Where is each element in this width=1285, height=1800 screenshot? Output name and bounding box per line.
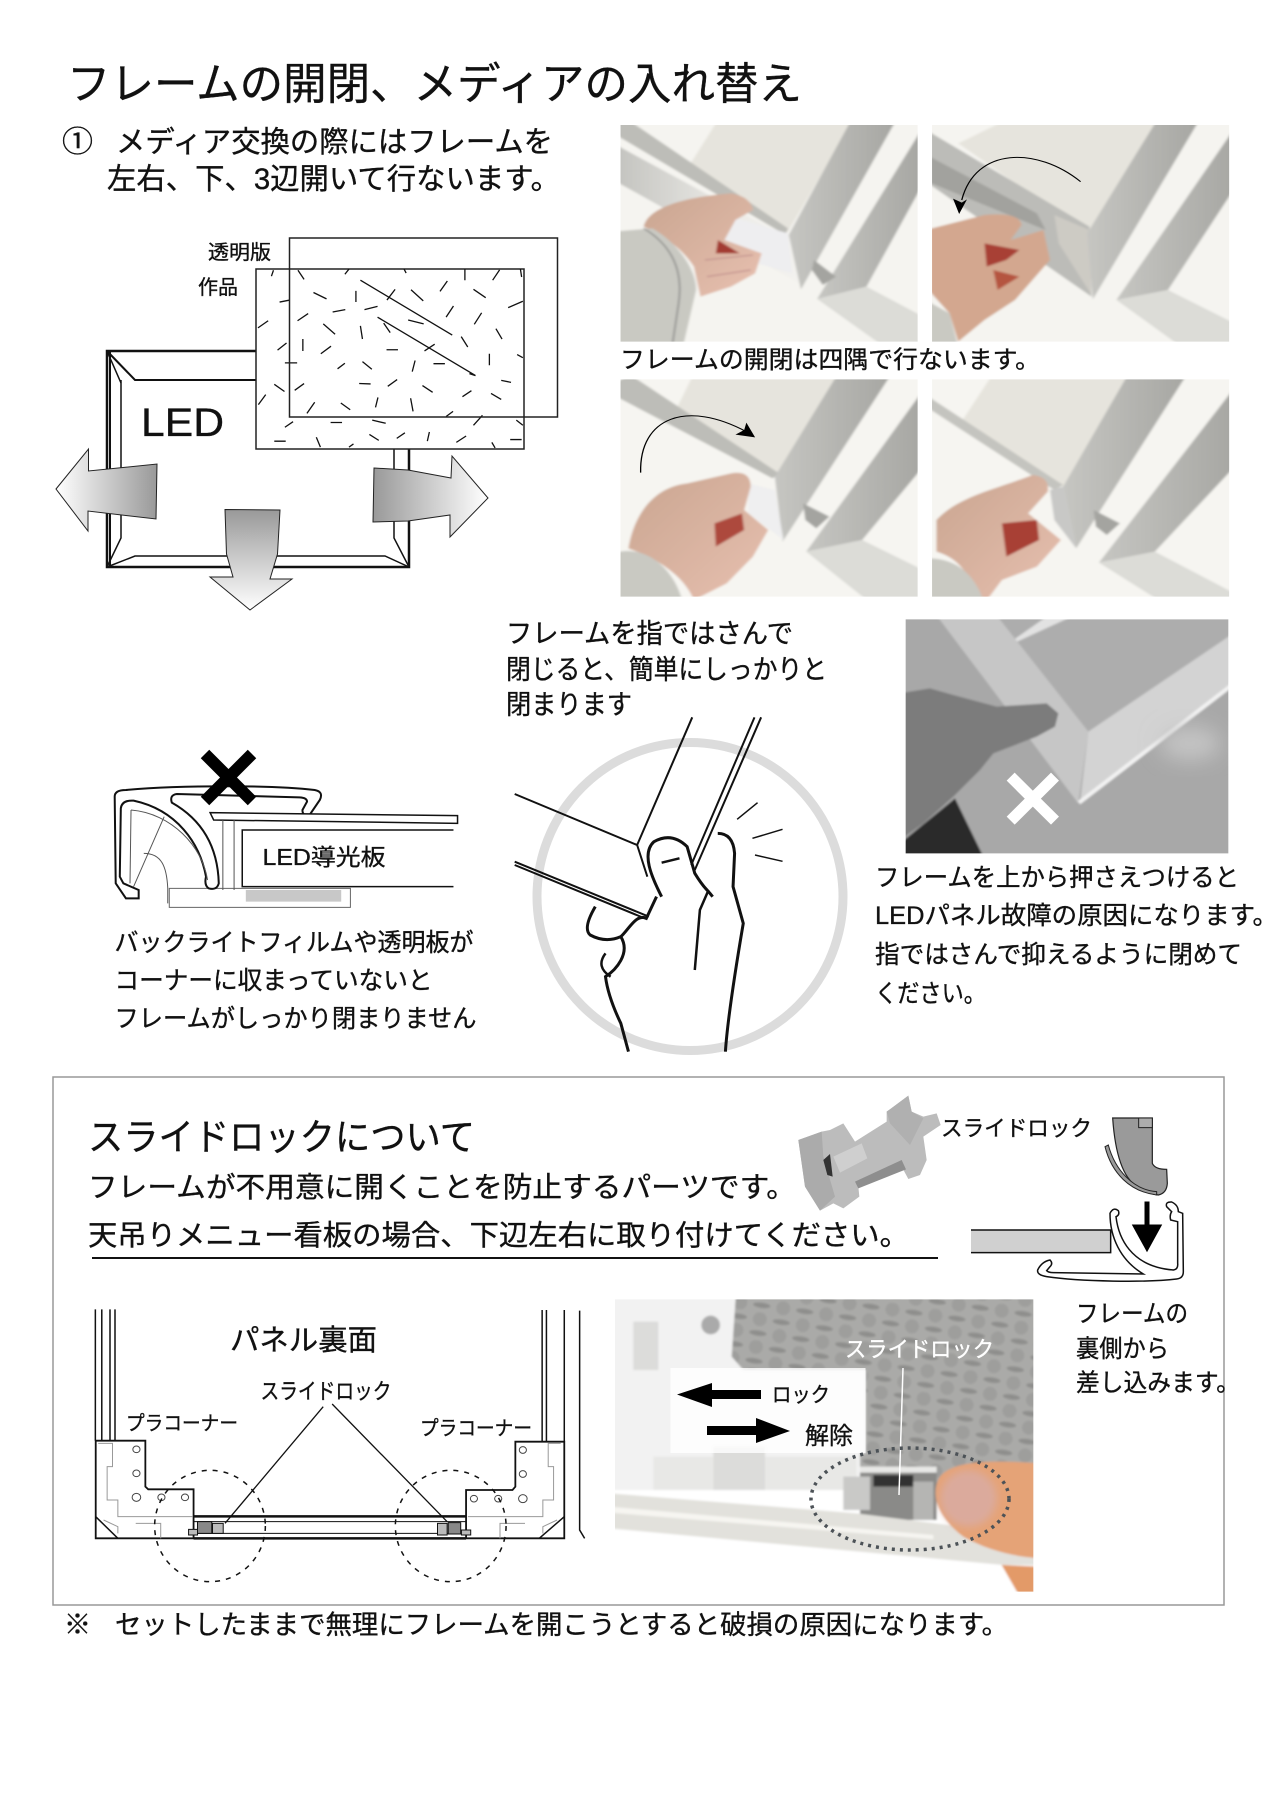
diagram: LED frame with media layers and opening arrows [56, 238, 558, 610]
arrow: insert downward [1136, 1202, 1158, 1247]
text block: pressing warning: LEDパネル故障の原因になります。 [875, 902, 1278, 930]
arrow: curved clockwise [641, 416, 755, 473]
photo grid: opening the frame corners [613, 120, 1238, 603]
text block: slide lock description [88, 1172, 938, 1258]
pointer line [899, 1368, 903, 1495]
label: plastic corner right: プラコーナー [420, 1418, 532, 1440]
photo 2 [923, 120, 1238, 347]
text block: step 1: ① [62, 126, 93, 159]
diagram: panel back side [95, 1309, 585, 1582]
footnote: ※ [64, 1610, 91, 1640]
text block: backlight film warning: コーナーに収まっていないと [114, 967, 432, 995]
label: plastic corner left: プラコーナー [126, 1413, 238, 1435]
caption: corners: フレームの開閉は四隅で行ないます。 [620, 346, 1040, 374]
arrow: release direction [707, 1418, 790, 1443]
label: slide lock white: スライドロック [845, 1337, 994, 1362]
arrow: curved counter-clockwise [953, 157, 1081, 214]
photo 1 [613, 120, 923, 347]
text block: insert from back: 差し込みます。 [1076, 1369, 1240, 1397]
text block: pressing warning: ください。 [875, 980, 986, 1008]
LED frame [107, 351, 409, 567]
arrow: right [373, 456, 488, 537]
text block: backlight film warning [114, 929, 476, 1033]
text block: backlight film warning: フレームがしっかり閉まりません [114, 1005, 476, 1033]
LED label: LED [141, 401, 224, 445]
text block: backlight film warning: バックライトフィルムや透明板が [114, 929, 474, 957]
label: release: 解除 [805, 1423, 853, 1450]
text block: slide lock description: 天吊りメニュー看板の場合、下辺左右に取り付けてください。 [88, 1220, 909, 1252]
label: slide lock: スライドロック [260, 1379, 392, 1404]
illustration: hand pinching frame [515, 717, 843, 1052]
photo 4 [932, 379, 1230, 597]
photo: slide lock operation [610, 1293, 1040, 1600]
text block: insert from back: フレームの [1076, 1301, 1188, 1328]
text block: step 1: メディア交換の際にはフレームを [116, 126, 553, 159]
text block: slide lock description: フレームが不用意に開くことを防止するパーツです。 [88, 1172, 796, 1204]
title: フレームの開閉、メディアの入れ替え [67, 60, 802, 109]
transparent board [290, 238, 558, 417]
text block: pressing warning: 指ではさんで抑えるように閉めて [875, 941, 1242, 969]
label: LED light guide: LED導光板 [262, 844, 386, 870]
label: lock: ロック [772, 1384, 830, 1407]
text block: pressing warning: フレームを上から押さえつけると [875, 864, 1239, 892]
arrow: down [210, 510, 292, 610]
text block: insert from back [1076, 1301, 1240, 1397]
photo 3 [613, 373, 923, 603]
text block: step 1 [62, 126, 560, 196]
label: panel back: パネル裏面 [230, 1324, 377, 1357]
arrow: left [56, 449, 157, 531]
text block: pinch to close: 閉じると、簡単にしっかりと [506, 655, 827, 685]
text block: insert from back: 裏側から [1076, 1335, 1169, 1363]
artwork sheet [256, 269, 524, 449]
text block: pinch to close: 閉まります [506, 690, 632, 720]
heading: slide lock: スライドロックについて [88, 1117, 475, 1158]
translucent label panel [670, 1368, 866, 1453]
label: slide lock part: スライドロック [941, 1116, 1092, 1141]
dotted highlight [811, 1448, 1009, 1550]
icon: black X [205, 754, 252, 801]
diagram: inserting lock into frame [971, 1118, 1183, 1281]
diagram: frame cross-section [115, 754, 458, 907]
label: artwork: 作品 [198, 276, 238, 299]
icon: white X [1011, 777, 1055, 821]
text block: pinch to close: フレームを指ではさんで [506, 619, 793, 649]
photo: do not press from above [900, 613, 1233, 860]
panel: slide lock [53, 1077, 1240, 1605]
label: transparent board: 透明版 [208, 241, 271, 264]
text block: pinch to close [506, 619, 827, 720]
arrow: lock direction [677, 1383, 761, 1407]
text block: step 1: 左右、下、3辺開いて行ないます。 [107, 163, 560, 196]
photo: slide lock part [798, 1096, 941, 1211]
footnote: セットしたままで無理にフレームを開こうとすると破損の原因になります。 [115, 1610, 1008, 1640]
text block: pressing warning [875, 864, 1278, 1008]
